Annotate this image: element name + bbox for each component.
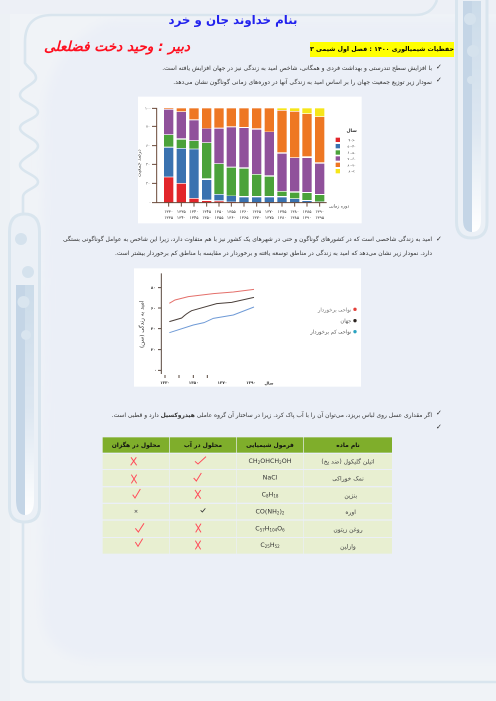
x axis labels second row: ۱۳۵۰ bbox=[202, 215, 211, 220]
bar 4 bbox=[202, 108, 211, 203]
bar 8 bbox=[252, 108, 261, 203]
table row: petroleum jelly: C bbox=[260, 542, 265, 549]
line chart x labels bbox=[160, 380, 274, 385]
y axis values: ۸۰ bbox=[146, 125, 150, 129]
x axis labels second row: ۱۳۷۰ bbox=[252, 215, 261, 220]
check mark 3: ✓ bbox=[436, 235, 442, 243]
table row: olive oil bbox=[103, 521, 392, 537]
table row: gasoline: H bbox=[269, 491, 274, 498]
check mark 1: ✓ bbox=[436, 63, 442, 71]
table header row: محلول در هگزان bbox=[112, 441, 161, 449]
bar 7 bbox=[239, 108, 249, 203]
x axis labels first row: ۱۳۳۰ bbox=[164, 209, 173, 214]
check mark 5: ✓ bbox=[436, 423, 442, 431]
table row: petroleum jelly bbox=[103, 538, 392, 554]
y axis values: ۲۰ bbox=[146, 182, 150, 186]
bar 2 bbox=[177, 108, 186, 203]
x axis labels second row: ۱۳۳۵ bbox=[164, 215, 174, 220]
table row: urea: اوره bbox=[345, 509, 356, 516]
yellow heading bbox=[310, 42, 454, 57]
solubility table bbox=[103, 437, 392, 554]
paragraph 1: با افزایش سطح تندرستی و بهداشت فردی و همگانی، شاخص امید به زندگی نیز در جهان افزایش یافته است. bbox=[162, 64, 432, 72]
x axis title: دوره زمانی bbox=[329, 204, 349, 209]
chart legend bbox=[336, 128, 357, 174]
bar 3 bbox=[189, 108, 199, 203]
line chart x labels: ۱۳۷۰ bbox=[217, 380, 227, 385]
line chart y values: ۴۰ bbox=[151, 326, 156, 331]
table row: petroleum jelly: 25 bbox=[265, 544, 270, 549]
table row: gasoline: 18 bbox=[273, 493, 279, 498]
x axis labels second row: ۱۳۴۵ bbox=[190, 215, 199, 220]
line chart y values: ۲۰ bbox=[151, 347, 156, 352]
chart legend: ۸۰-۷۰ bbox=[347, 163, 356, 167]
right test tube bbox=[456, 0, 487, 238]
table header row: فرمول شیمیایی bbox=[246, 442, 294, 449]
x axis labels second row: ۱۳۶۰ bbox=[227, 215, 236, 220]
paragraph 4: اگر مقداری عسل روی لباس بریزد، می‌توان آن را با آب پاک کرد. زیرا در ساختار آن گروه عاملی هیدروکسیل دارد و قطبی است. bbox=[112, 412, 432, 418]
x axis labels second row: ۱۳۵۵ bbox=[215, 215, 224, 220]
table row: ethylene glycol: اتیلن گلیکول (ضد یخ) bbox=[321, 457, 375, 465]
bar 10 bbox=[277, 108, 287, 203]
table row: ethylene glycol: OHCH bbox=[260, 458, 279, 465]
table row: olive oil: 6 bbox=[282, 527, 285, 532]
table row: olive oil: 104 bbox=[270, 527, 278, 532]
title: بنام خداوند جان و خرد bbox=[169, 13, 297, 27]
line chart x labels: ۱۳۹۰ bbox=[246, 380, 256, 385]
bar 6 bbox=[227, 108, 236, 203]
paragraph 2: نمودار زیر توزیع جمعیت جهان را بر اساس امید به زندگی آنها در دوره‌های زمانی گوناگون نشان می‌دهد. bbox=[173, 78, 432, 86]
y axis values: ۰ bbox=[149, 201, 151, 205]
chart legend: ۸۰< bbox=[348, 170, 355, 174]
line chart x labels: ۱۳۵۰ bbox=[189, 380, 199, 385]
table row: olive oil: H bbox=[265, 525, 270, 532]
table row: urea: CO(NH bbox=[256, 508, 277, 515]
table row: olive oil: روغن زیتون bbox=[333, 526, 363, 533]
chart legend: ۶۰-۵۰ bbox=[347, 151, 356, 155]
x axis labels first row: ۱۳۵۰ bbox=[215, 209, 223, 214]
x axis labels first row: ۱۳۷۵ bbox=[278, 209, 287, 214]
table row: ethylene glycol: CH bbox=[249, 458, 258, 465]
chart axes bbox=[152, 108, 327, 207]
x axis labels first row: ۱۳۷۰ bbox=[265, 209, 274, 214]
y axis values: ۴۰ bbox=[146, 163, 150, 167]
line chart axes bbox=[158, 273, 207, 378]
world line bbox=[169, 297, 254, 322]
table row: table salt bbox=[103, 470, 392, 486]
line chart y values: ۸۰ bbox=[151, 285, 156, 290]
table header row: محلول در آب bbox=[184, 440, 222, 449]
table row: petroleum jelly: 52 bbox=[275, 544, 280, 549]
check mark 2: ✓ bbox=[436, 76, 442, 84]
table row: olive oil: C bbox=[255, 525, 260, 532]
yellow heading: حفظیات شیمیالوری ۱۴۰۰ : فصل اول شیمی ۳ bbox=[310, 46, 454, 53]
line chart y values bbox=[151, 285, 157, 373]
chart legend: ۴۰> bbox=[348, 138, 355, 142]
x axis labels first row: ۱۳۸۵ bbox=[303, 209, 312, 214]
bar 13 bbox=[315, 108, 324, 203]
line chart legend: نواحی برخوردار bbox=[317, 307, 351, 313]
x axis labels second row: ۱۳۹۵ bbox=[315, 215, 325, 220]
x axis labels first row bbox=[164, 209, 324, 214]
y axis title: درصد جمعیت bbox=[137, 149, 143, 177]
x axis labels second row: ۱۳۹۰ bbox=[303, 215, 311, 220]
check mark 4: ✓ bbox=[436, 409, 442, 417]
table row: gasoline: بنزین bbox=[344, 492, 358, 499]
table header row bbox=[103, 437, 392, 453]
developed regions line bbox=[169, 289, 254, 303]
table row: urea: 2 bbox=[282, 510, 285, 515]
x axis labels first row: ۱۳۵۵ bbox=[227, 209, 237, 214]
table row: gasoline: 8 bbox=[266, 493, 269, 498]
table row: olive oil: O bbox=[277, 525, 282, 532]
table row: table salt: NaCl bbox=[263, 475, 278, 482]
x axis labels second row bbox=[164, 215, 325, 220]
line chart panel bbox=[134, 268, 361, 387]
x axis labels first row: ۱۳۴۵ bbox=[202, 209, 212, 214]
x axis labels first row: ۱۳۹۰ bbox=[315, 209, 324, 214]
line chart legend: نواحی کم برخوردار bbox=[309, 330, 351, 336]
table row: table salt: نمک خوراکی bbox=[332, 475, 364, 482]
author line: دبیر : وحید دخت فضلعلی bbox=[44, 39, 190, 55]
line chart x labels: ۱۳۳۰ bbox=[160, 380, 170, 385]
chart legend: ۷۰-۶۰ bbox=[347, 157, 356, 161]
x axis labels second row: ۱۳۸۵ bbox=[290, 215, 300, 220]
line chart y values: ۶۰ bbox=[151, 305, 156, 310]
x axis labels second row: ۱۳۸۰ bbox=[278, 215, 286, 220]
x axis labels first row: ۱۳۳۵ bbox=[177, 209, 187, 214]
table row: gasoline: C bbox=[262, 491, 266, 498]
table row: ethylene glycol: 2 bbox=[279, 460, 282, 465]
bar 9 bbox=[265, 108, 274, 203]
bar 5 bbox=[214, 108, 224, 203]
line chart y title: امید به زندگی (سن) bbox=[137, 300, 145, 348]
table row: ethylene glycol bbox=[103, 454, 392, 469]
left test tube bbox=[10, 214, 40, 522]
table row: gasoline bbox=[103, 487, 392, 503]
table row: petroleum jelly: H bbox=[270, 542, 275, 549]
x axis labels first row: ۱۳۶۵ bbox=[252, 209, 262, 214]
x axis labels first row: ۱۳۴۰ bbox=[190, 209, 198, 214]
x axis labels second row: ۱۳۷۵ bbox=[265, 215, 275, 220]
line chart y values: ۰ bbox=[154, 368, 157, 373]
table row: petroleum jelly: وازلین bbox=[340, 543, 356, 550]
bar 11 bbox=[290, 108, 299, 203]
stacked bar chart panel bbox=[137, 97, 362, 223]
table row: ethylene glycol: OH bbox=[282, 458, 292, 465]
y axis values: ۶۰ bbox=[146, 144, 150, 148]
y axis values bbox=[145, 107, 151, 205]
bar 1 bbox=[164, 108, 173, 203]
x axis labels first row: ۱۳۶۰ bbox=[240, 209, 248, 214]
table header row: نام ماده bbox=[336, 442, 360, 449]
x axis labels second row: ۱۳۶۵ bbox=[240, 215, 249, 220]
table row: urea: 2 bbox=[277, 510, 280, 515]
table row: urea: ) bbox=[279, 508, 282, 515]
table row: ethylene glycol: 2 bbox=[258, 460, 261, 465]
less developed regions line bbox=[169, 307, 254, 333]
line chart x labels: سال bbox=[265, 380, 274, 385]
x axis labels first row: ۱۳۸۰ bbox=[290, 209, 299, 214]
table row: urea bbox=[103, 504, 392, 519]
bar 12 bbox=[302, 108, 312, 203]
paragraph 3 second line: دارد. نمودار زیر نشان می‌دهد که امید به زندگی در مناطق توسعه یافته و برخوردار در مقایسه با مناطق کم برخوردار بیشتر است. bbox=[115, 250, 432, 257]
chart legend: ۵۰-۴۰ bbox=[347, 145, 356, 149]
line chart legend: جهان bbox=[340, 319, 351, 325]
x axis labels second row: ۱۳۴۰ bbox=[177, 215, 186, 220]
table row: olive oil: 57 bbox=[260, 527, 265, 532]
y axis values: ۱۰۰ bbox=[145, 107, 151, 111]
chart legend: سال bbox=[346, 128, 357, 134]
line chart legend bbox=[309, 307, 357, 336]
paragraph 3: امید به زندگی شاخصی است که در کشورهای گوناگون و حتی در شهرهای یک کشور نیز با هم متفاوت دارد، زیرا این شاخص به عوامل گوناگونی بستگی bbox=[63, 236, 432, 243]
